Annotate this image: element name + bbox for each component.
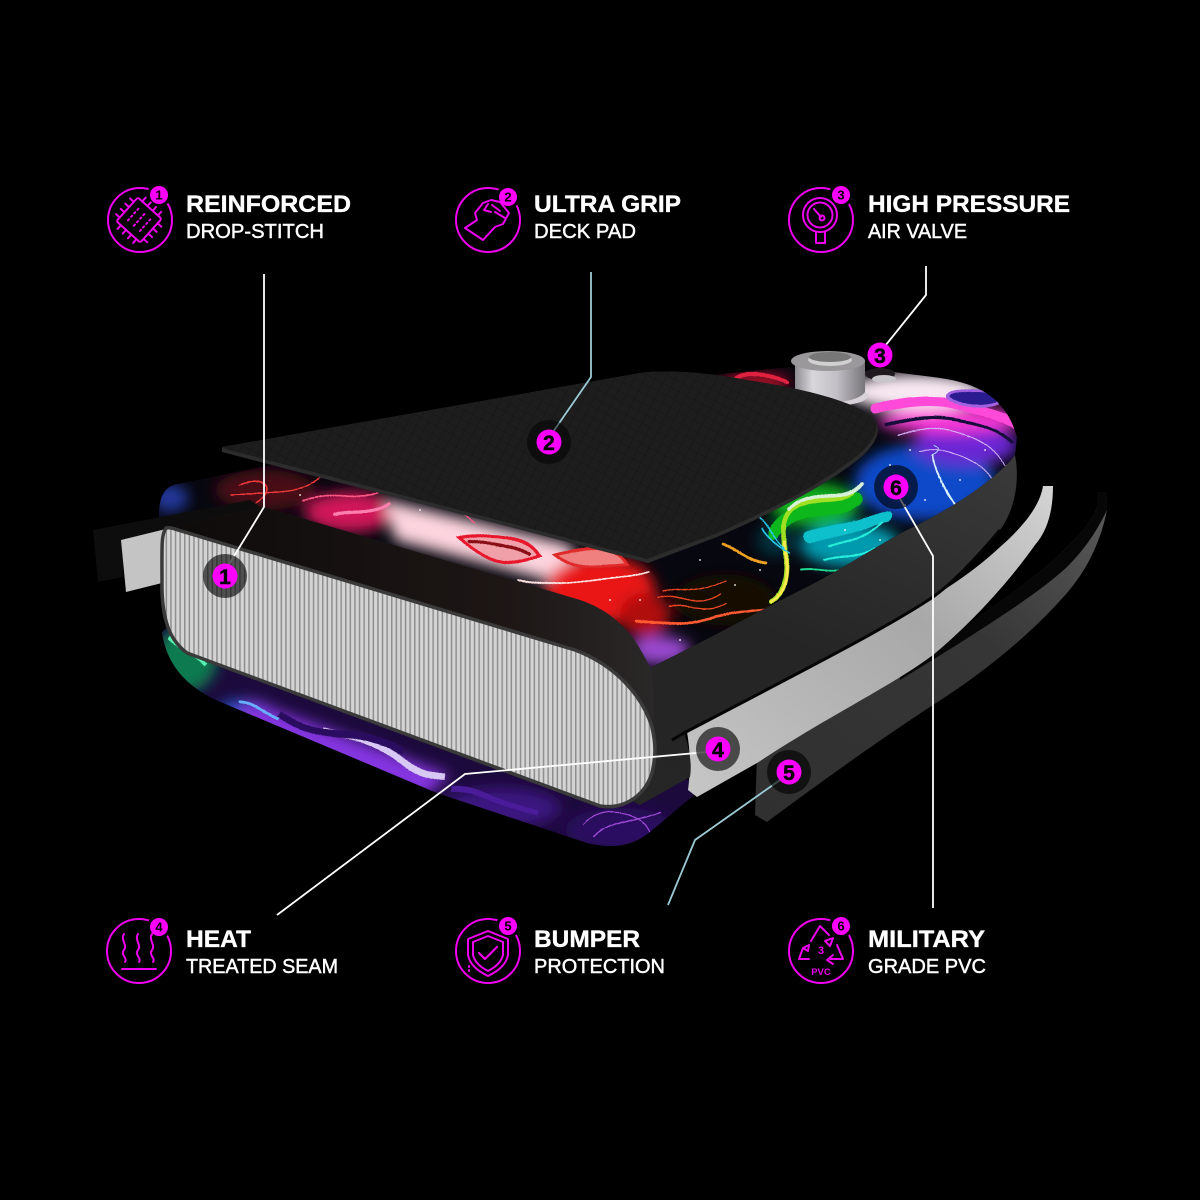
icon: recycle pvc: PVC — [811, 967, 831, 978]
part: left black bumper end — [93, 500, 262, 582]
label: heat treated seam: HEAT — [186, 926, 251, 953]
icon: recycle pvc: 6 — [837, 918, 845, 934]
marker 6 — [874, 465, 918, 509]
label: bumper protection — [534, 926, 665, 978]
marker 5 — [767, 750, 811, 794]
leader line 2 — [553, 272, 591, 432]
leader line 3 — [885, 266, 926, 346]
marker 6: 6 — [890, 477, 902, 500]
label: high pressure air valve: AIR VALVE — [868, 221, 967, 243]
icon: recycle pvc — [789, 914, 853, 983]
icon: shield: 5 — [504, 918, 512, 934]
label: reinforced drop-stitch: DROP-STITCH — [186, 221, 324, 243]
part: black bumper strip right — [755, 492, 1107, 822]
marker 4 — [696, 727, 740, 771]
part: deck pad — [222, 371, 878, 563]
label: reinforced drop-stitch — [186, 191, 351, 243]
part: rail groove — [672, 530, 1000, 740]
marker 3 — [868, 342, 892, 368]
marker 1 — [203, 554, 247, 598]
label: ultra grip deck pad — [534, 191, 681, 243]
part: drop-stitch core panel — [162, 528, 655, 807]
part: air valve — [791, 351, 896, 406]
icon: grip fist: 2 — [504, 190, 512, 204]
marker 3: 3 — [874, 345, 886, 368]
icon: pressure gauge: 3 — [837, 188, 845, 202]
marker 4: 4 — [712, 739, 724, 762]
marker 5: 5 — [783, 762, 795, 785]
part: left silver strip end — [121, 528, 170, 592]
icon: shield — [456, 914, 520, 983]
leader line 4 — [277, 752, 707, 915]
label: bumper protection: BUMPER — [534, 926, 640, 953]
board illustration — [93, 351, 1107, 860]
label: reinforced drop-stitch: REINFORCED — [186, 191, 351, 218]
label: ultra grip deck pad: ULTRA GRIP — [534, 191, 681, 218]
label: military grade pvc — [868, 926, 986, 978]
marker 2: 2 — [543, 432, 555, 455]
label: high pressure air valve: HIGH PRESSURE — [868, 191, 1070, 218]
label: bumper protection: PROTECTION — [534, 956, 665, 978]
label: military grade pvc: MILITARY — [868, 926, 985, 953]
neon marble swirls — [232, 374, 1015, 628]
label: high pressure air valve — [868, 191, 1070, 243]
icon: pressure gauge — [789, 183, 853, 252]
leader line 5 — [668, 780, 780, 905]
icon: heat waves: 4 — [155, 920, 163, 934]
marker 2 — [527, 420, 571, 464]
label: ultra grip deck pad: DECK PAD — [534, 221, 636, 243]
part: black side rail and seam band — [166, 455, 1017, 805]
leader line 6 — [899, 497, 933, 908]
part: dark inner seam band — [166, 507, 654, 740]
icon: drop-stitch: 1 — [155, 188, 163, 202]
icon: recycle pvc: 3 — [818, 945, 824, 957]
leader line 1 — [228, 274, 264, 566]
label: military grade pvc: GRADE PVC — [868, 956, 986, 978]
icon: drop-stitch — [108, 183, 172, 252]
marker 1: 1 — [219, 566, 231, 589]
label: heat treated seam: TREATED SEAM — [186, 956, 338, 978]
icon: heat waves — [107, 915, 171, 983]
part: silver bumper strip right — [687, 486, 1053, 797]
icon: grip fist — [456, 185, 520, 252]
layer: printed bottom sheet — [162, 628, 694, 846]
label: heat treated seam — [186, 926, 338, 978]
star specks — [300, 450, 985, 640]
layer: printed top sheet — [159, 367, 1017, 668]
